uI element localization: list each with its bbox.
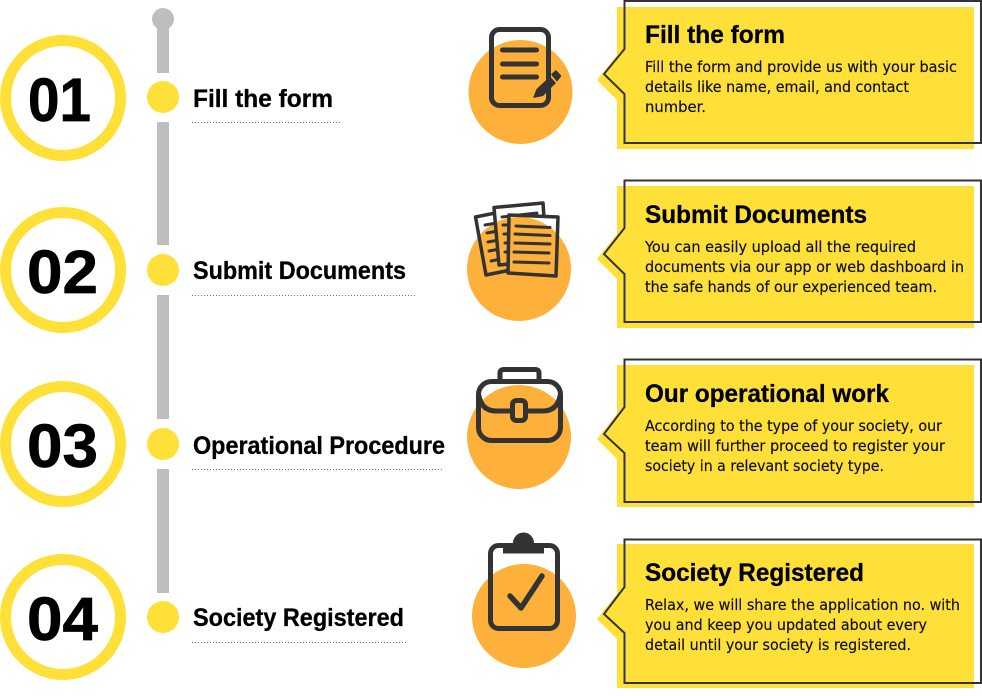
step 02 label: Submit Documents [193, 257, 406, 285]
step 02 number: 02 [27, 238, 98, 306]
step 02 number [6, 212, 120, 328]
step 01 number: 01 [28, 66, 91, 134]
panel: our operational work: Our operational work [645, 380, 889, 408]
panel: society registered: detail until your society is registered. [645, 636, 911, 654]
panel: our operational work: society in a relevant society type. [645, 457, 884, 475]
panel: submit documents [597, 180, 981, 328]
panel: our operational work: team will further proceed to register your [645, 437, 946, 455]
icon: form with pencil [468, 30, 572, 144]
panel: fill the form: number. [645, 98, 706, 116]
step 04 number: 04 [27, 585, 98, 653]
panel: our operational work [597, 360, 981, 507]
panel: fill the form: Fill the form [645, 21, 785, 49]
panel: submit documents: Submit Documents [645, 201, 867, 229]
panel: fill the form [597, 1, 981, 149]
step 03 label: Operational Procedure [193, 432, 445, 460]
panel: society registered [597, 540, 981, 688]
icon: documents [467, 203, 571, 321]
panel: fill the form: details like name, email, and contact [645, 78, 909, 96]
panel: submit documents: You can easily upload all the required [644, 238, 916, 256]
step 01 number [6, 40, 120, 156]
step 04 number [6, 560, 120, 674]
step 01 label: Fill the form [193, 85, 333, 113]
panel: society registered: Relax, we will share the application no. with [645, 596, 960, 614]
panel: society registered: Society Registered [645, 559, 864, 587]
timeline [147, 8, 179, 633]
icon: briefcase [467, 370, 571, 489]
panel: fill the form: Fill the form and provide us with your basic [645, 58, 957, 76]
step 04 label: Society Registered [193, 604, 404, 632]
panel: society registered: you and keep you updated about every [645, 616, 927, 634]
step 03 number: 03 [27, 412, 98, 480]
panel: our operational work: According to the type of your society, our [645, 417, 943, 435]
panel: submit documents: the safe hands of our experienced team. [645, 278, 937, 296]
icon: clipboard with check [472, 532, 576, 668]
panel: submit documents: documents via our app or web dashboard in [645, 258, 964, 276]
step 03 number [6, 386, 120, 502]
